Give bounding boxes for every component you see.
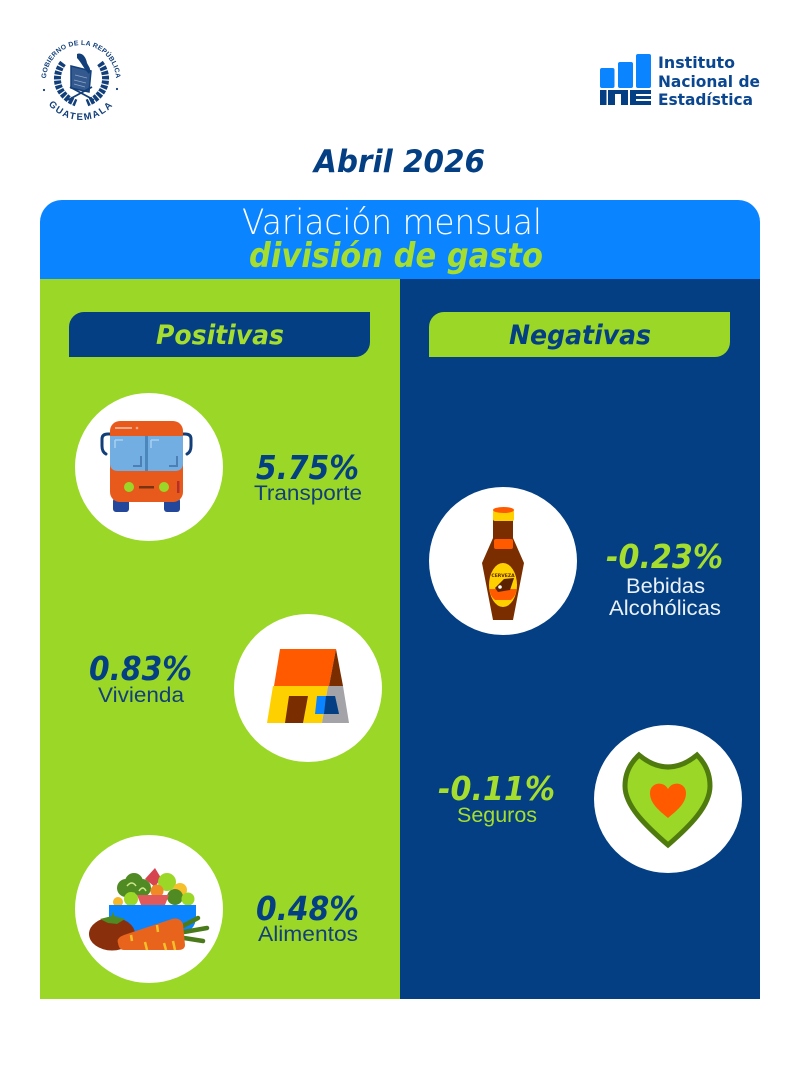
icon: food bowl (89, 868, 207, 950)
value: 5.75%: 5.75% (256, 448, 359, 487)
label: Bebidas Alcohólicas: Alcohólicas (609, 597, 721, 620)
logo wordmark: Instituto (658, 53, 735, 72)
label: Vivienda: Vivienda (98, 684, 184, 707)
value: 0.48%: 0.48% (256, 889, 359, 928)
logo: Gobierno de Guatemala seal (42, 40, 120, 120)
banner: Positivas: Positivas (156, 320, 284, 351)
icon: beer bottle (482, 507, 524, 620)
label: Seguros: Seguros (457, 804, 537, 827)
panel: negativas (400, 279, 760, 999)
heading: variación mensual: Variación mensual (242, 203, 542, 243)
item: alimentos (75, 835, 359, 983)
logo bars (600, 54, 651, 88)
value: -0.11%: -0.11% (438, 769, 555, 808)
label: Transporte: Transporte (254, 482, 362, 505)
banner: Positivas (69, 312, 370, 357)
banner: Negativas (429, 312, 730, 357)
icon: bus (102, 421, 191, 512)
logo: Instituto Nacional de Estadística (600, 53, 760, 109)
logo wordmark (658, 53, 760, 109)
item: transporte (75, 393, 362, 541)
banner: Negativas: Negativas (509, 320, 651, 351)
title: month: Abril 2026 (311, 144, 485, 180)
item: bebidas alcohólicas (429, 487, 723, 635)
label: Bebidas Alcohólicas: Bebidas (626, 575, 705, 598)
logo wordmark: Nacional de (658, 72, 760, 91)
logo letters INE (600, 90, 651, 105)
heading: división de gasto: división de gasto (249, 236, 543, 276)
label: Alimentos: Alimentos (258, 923, 358, 946)
icon: shield with heart (625, 755, 710, 845)
icon: house (267, 649, 349, 723)
value: -0.23%: -0.23% (606, 537, 723, 576)
value: 0.83%: 0.83% (89, 649, 192, 688)
item: seguros (438, 725, 742, 873)
label: Bebidas Alcohólicas (609, 575, 721, 620)
logo wordmark: Estadística (658, 90, 753, 109)
item: vivienda (89, 614, 382, 762)
panel: header (40, 200, 760, 279)
icon: beer bottle: CERVEZA (491, 573, 515, 579)
logo: Gobierno de Guatemala seal: GUATEMALA (50, 101, 112, 120)
panel: positivas (40, 279, 400, 999)
logo: Gobierno de Guatemala seal: GOBIERNO DE LA REPÚBLICA (42, 40, 120, 78)
